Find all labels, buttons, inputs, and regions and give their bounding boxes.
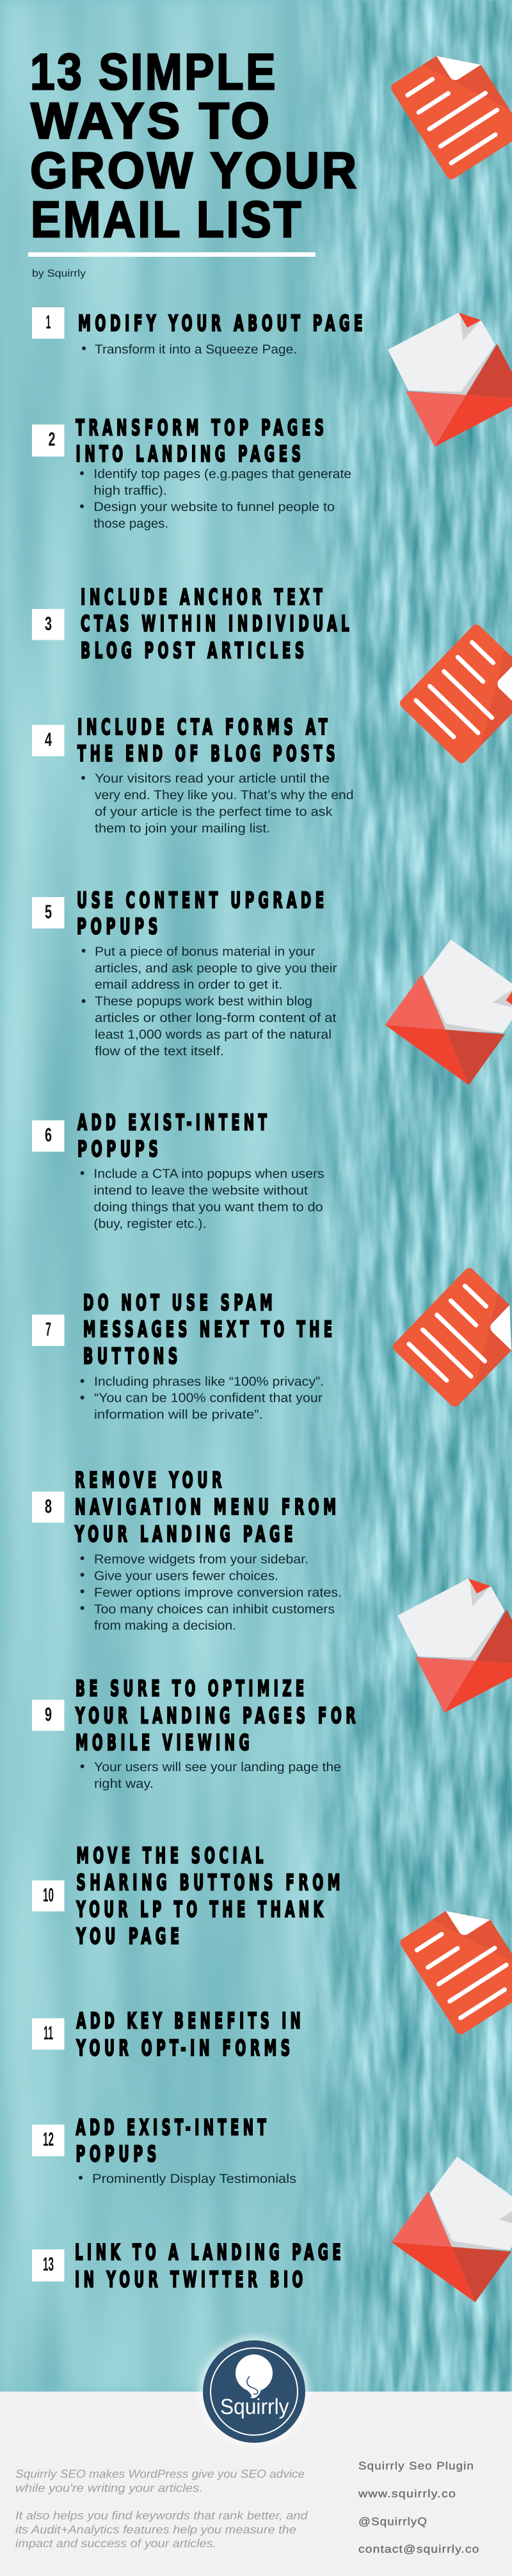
tip 10: YOUR LP TO THE THANK xyxy=(76,1897,327,1922)
title: GROW YOUR xyxy=(30,142,359,198)
tip 8: Remove widgets from your sidebar. xyxy=(94,1552,308,1566)
tip 10 xyxy=(32,1843,344,1949)
tip 4: 4 xyxy=(45,729,52,750)
tip 4: them to join your mailing list. xyxy=(95,822,270,836)
tip 12: Prominently Display Testimonials xyxy=(92,2172,296,2186)
footer description: its Audit+Analytics features help you measure the xyxy=(15,2523,296,2536)
tip 7 xyxy=(32,1290,336,1422)
tip 2: 2 xyxy=(49,429,55,450)
tip 7: “You can be 100% confident that your xyxy=(94,1391,323,1405)
tip 7: 7 xyxy=(45,1319,51,1340)
tip 12: POPUPS xyxy=(76,2141,161,2167)
tip 4: of your article is the perfect time to ask xyxy=(95,805,333,819)
tip 11: YOUR OPT-IN FORMS xyxy=(76,2036,294,2061)
tip 1 xyxy=(32,307,367,357)
title: EMAIL LIST xyxy=(31,191,303,248)
tip 2: high traffic). xyxy=(93,483,167,498)
footer contacts: www.squirrly.co xyxy=(358,2488,456,2500)
tip 5: USE CONTENT UPGRADE xyxy=(77,887,328,913)
tip 9 xyxy=(32,1676,360,1791)
tip 5 xyxy=(32,887,337,1058)
tip 9: MOBILE VIEWING xyxy=(76,1730,253,1756)
tip 5: These popups work best within blog xyxy=(95,994,312,1009)
tip 2 xyxy=(32,415,351,531)
tip 4: Your visitors read your article until the xyxy=(95,772,330,786)
tip 6: ADD EXIST-INTENT xyxy=(77,1110,271,1136)
icon: document 4 xyxy=(398,1893,512,2036)
title: WAYS TO xyxy=(31,92,272,149)
tip 2: Identify top pages (e.g.pages that generate xyxy=(93,467,351,481)
footer contacts: contact@squirrly.co xyxy=(358,2543,480,2555)
tip 12: ADD EXIST-INTENT xyxy=(76,2115,270,2141)
tip 4: INCLUDE CTA FORMS AT xyxy=(77,715,332,740)
tip 6: Include a CTA into popups when users xyxy=(93,1167,324,1181)
icon: envelope 1 xyxy=(388,312,512,447)
tip 2: Design your website to funnel people to xyxy=(93,500,335,514)
tip 2: INTO LANDING PAGES xyxy=(76,442,305,467)
logo: Squirrly badge: Squirrly xyxy=(220,2395,289,2419)
tip 5: email address in order to get it. xyxy=(95,978,282,992)
tip 9: Your users will see your landing page the xyxy=(94,1760,341,1774)
icon: document 1 xyxy=(389,38,512,181)
tip 7: information will be private”. xyxy=(94,1408,263,1422)
tip 5: articles, and ask people to give you their xyxy=(95,961,337,975)
byline: by Squirrly xyxy=(32,268,86,279)
tip 5: flow of the text itself. xyxy=(95,1044,224,1058)
tip 6: (buy, register etc.). xyxy=(93,1217,206,1231)
tip 5: articles or other long-form content of at xyxy=(95,1011,337,1025)
footer description: impact and success of your articles. xyxy=(15,2537,216,2550)
footer description xyxy=(15,2468,308,2550)
tip 6: POPUPS xyxy=(77,1137,162,1162)
tip 1: 1 xyxy=(46,312,51,333)
logo: Squirrly badge xyxy=(200,2338,308,2445)
tip 1: Transform it into a Squeeze Page. xyxy=(95,343,297,357)
footer contacts: Squirrly Seo Plugin xyxy=(358,2460,474,2472)
footer panel xyxy=(0,2392,512,2576)
tip 13 xyxy=(32,2240,345,2292)
title underline xyxy=(28,252,316,257)
tip 8 xyxy=(32,1468,342,1633)
tip 6: doing things that you want them to do xyxy=(93,1200,323,1214)
icon: document 3 xyxy=(391,1266,512,1409)
tip 9: 9 xyxy=(45,1705,52,1725)
tip 6: 6 xyxy=(45,1125,52,1146)
tip 9: right way. xyxy=(94,1777,154,1791)
tip 13: IN YOUR TWITTER BIO xyxy=(75,2267,307,2292)
tip 11: ADD KEY BENEFITS IN xyxy=(76,2008,305,2034)
tip 6 xyxy=(32,1110,324,1231)
tip 5: least 1,000 words as part of the natural xyxy=(95,1028,332,1042)
tip 8: YOUR LANDING PAGE xyxy=(74,1521,297,1547)
tip 7: Including phrases like “100% privacy”. xyxy=(94,1375,324,1389)
footer contacts xyxy=(358,2460,480,2555)
tip 3: INCLUDE ANCHOR TEXT xyxy=(81,585,326,610)
tip 5: POPUPS xyxy=(77,914,162,940)
icon: envelope 3 xyxy=(397,1578,512,1713)
tip 7: BUTTONS xyxy=(83,1343,182,1369)
tip 10: YOU PAGE xyxy=(76,1924,184,1949)
title: 13 SIMPLE xyxy=(30,44,278,100)
tip 4 xyxy=(32,715,353,836)
tip 8: 8 xyxy=(45,1496,52,1518)
tip 8: from making a decision. xyxy=(94,1619,236,1633)
tip 10: MOVE THE SOCIAL xyxy=(76,1843,268,1868)
tip 8: Too many choices can inhibit customers xyxy=(94,1602,335,1616)
tip 8: Fewer options improve conversion rates. xyxy=(94,1585,342,1600)
icon: envelope 4 xyxy=(371,2140,512,2324)
footer description: while you're writing your articles. xyxy=(15,2482,203,2495)
tip 5: 5 xyxy=(45,902,52,923)
tip 6: intend to leave the website without xyxy=(93,1184,308,1198)
title xyxy=(30,44,359,248)
icon: document 2 xyxy=(398,622,512,765)
footer description: It also helps you find keywords that rank better, and xyxy=(15,2509,308,2522)
tip 9: BE SURE TO OPTIMIZE xyxy=(76,1676,308,1702)
tip 13: 13 xyxy=(43,2254,54,2275)
tip 7: MESSAGES NEXT TO THE xyxy=(83,1316,336,1342)
footer description: Squirrly SEO makes WordPress give you SEO advice xyxy=(15,2468,305,2481)
icon: envelope 2 xyxy=(364,923,512,1106)
tip 10: 10 xyxy=(43,1885,54,1906)
tip 4: very end. They like you. That’s why the end xyxy=(95,788,353,802)
tip 11 xyxy=(32,2008,305,2061)
tip 12 xyxy=(32,2115,296,2186)
footer contacts: @SquirrlyQ xyxy=(358,2515,428,2528)
tip 5: Put a piece of bonus material in your xyxy=(95,944,316,959)
tip 3: BLOG POST ARTICLES xyxy=(81,638,308,663)
tip 12: 12 xyxy=(43,2129,54,2150)
tip 2: those pages. xyxy=(93,517,168,531)
tip 8: Give your users fewer choices. xyxy=(94,1569,278,1583)
tip 3 xyxy=(32,585,353,663)
tip 2: TRANSFORM TOP PAGES xyxy=(76,415,328,441)
tip 8: REMOVE YOUR xyxy=(75,1468,226,1493)
tip 11: 11 xyxy=(44,2023,53,2044)
tip 7: DO NOT USE SPAM xyxy=(83,1290,276,1316)
tip 3: 3 xyxy=(45,613,52,635)
